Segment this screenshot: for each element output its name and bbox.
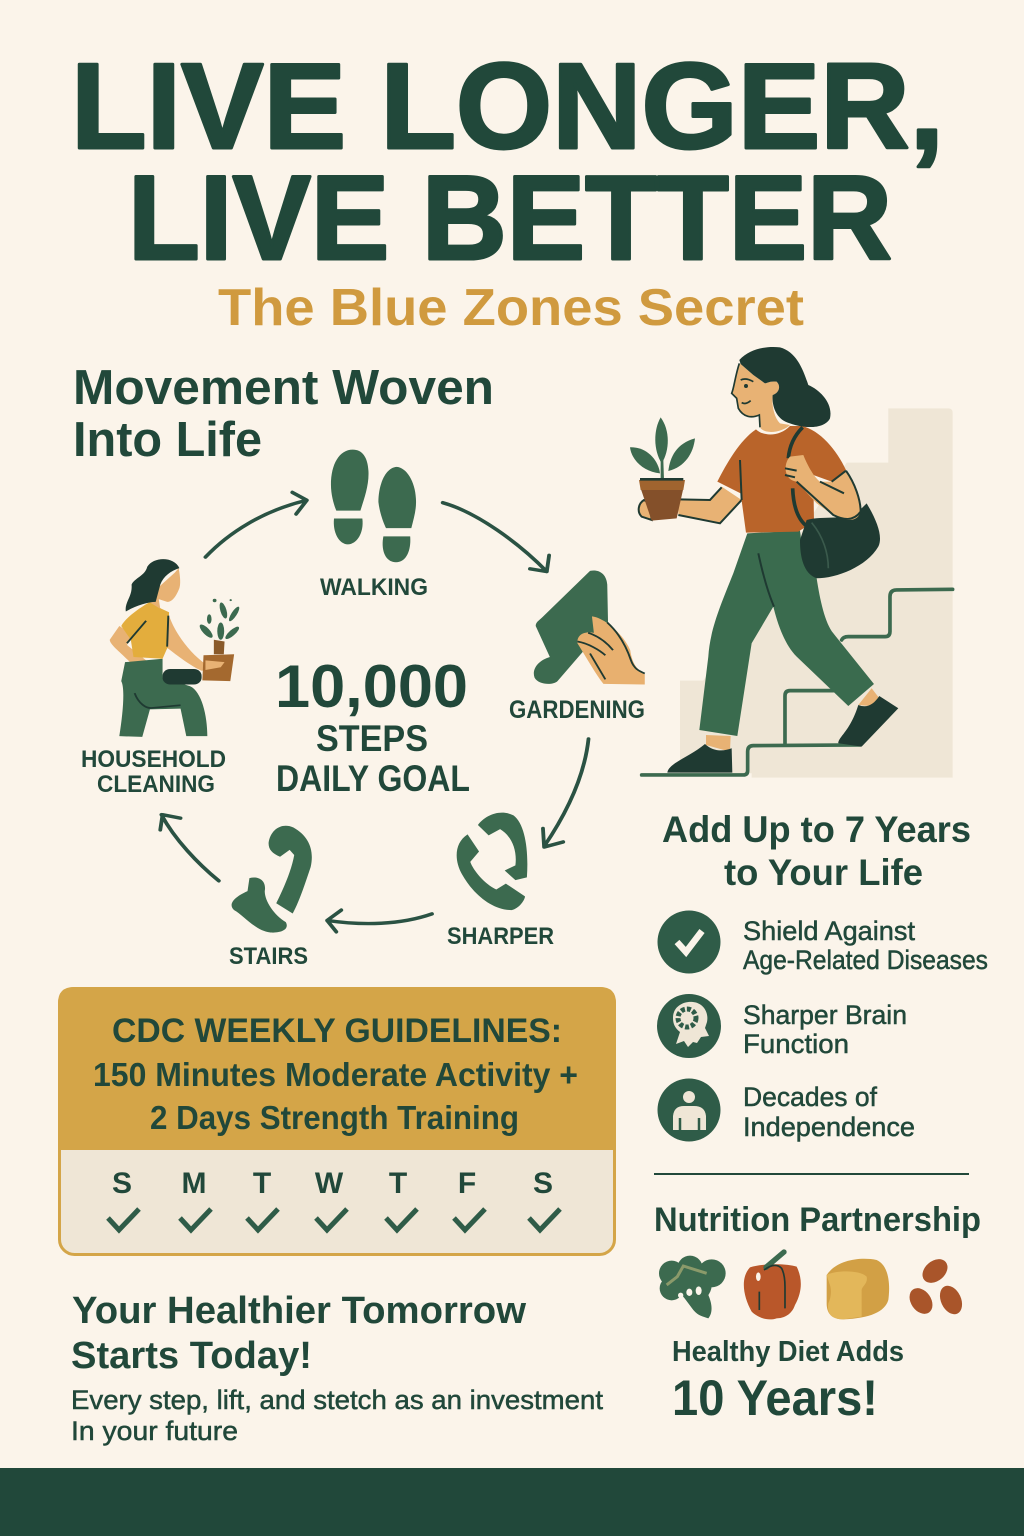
stair rail xyxy=(642,589,953,775)
icon: footprints xyxy=(331,450,416,562)
weekday tracker: M xyxy=(182,1167,206,1200)
body text: In your future xyxy=(71,1416,238,1446)
front arm xyxy=(785,455,861,520)
icon: phone shape xyxy=(457,813,527,910)
heading: healthier tomorrow xyxy=(71,1290,526,1377)
weekday tracker: T xyxy=(253,1167,271,1200)
arrow: gardening to sharper xyxy=(543,739,589,847)
arrow: walking to gardening xyxy=(443,503,549,572)
weekday tracker: F xyxy=(458,1167,476,1200)
heading: add years: Add Up to 7 Years xyxy=(662,809,971,850)
bag xyxy=(788,427,880,578)
box background xyxy=(58,987,616,1254)
footer band xyxy=(0,1468,1024,1536)
body text xyxy=(71,1385,603,1446)
title: LIVE BETTER xyxy=(128,151,892,285)
heading: movement woven into life: Movement Woven xyxy=(73,361,494,415)
shoes and ankles xyxy=(667,688,898,773)
panel: nutrition partnership xyxy=(654,1201,981,1426)
closing message xyxy=(71,1290,603,1446)
trousers xyxy=(699,531,874,736)
heading: healthier tomorrow: Your Healthier Tomorrow xyxy=(72,1290,526,1332)
label: stairs: STAIRS xyxy=(229,943,308,970)
icon: almonds xyxy=(905,1254,966,1318)
weekday tracker: W xyxy=(315,1167,344,1200)
guideline text: 150 Minutes Moderate Activity + xyxy=(93,1056,578,1093)
weekday tracker: S xyxy=(533,1167,553,1200)
benefit: independence xyxy=(743,1082,915,1142)
heading: movement woven into life: Into Life xyxy=(73,413,262,467)
guideline text xyxy=(93,1012,578,1136)
benefit: sharper brain: Function xyxy=(743,1029,849,1059)
weekday tracker xyxy=(108,1167,560,1230)
body text: Every step, lift, and stetch as an investment xyxy=(71,1385,603,1415)
icon: brain badge xyxy=(657,994,721,1058)
illustration: woman with plant xyxy=(110,559,241,737)
head xyxy=(732,347,830,432)
arrow: sharper to stairs xyxy=(327,910,432,932)
weekday tracker: S xyxy=(112,1167,132,1200)
icon: gardening cloth and hand xyxy=(534,571,645,685)
shirt xyxy=(717,426,846,533)
benefit: sharper brain: Sharper Brain xyxy=(743,1000,907,1030)
label: household cleaning: HOUSEHOLD xyxy=(81,746,226,773)
heading: nutrition: Nutrition Partnership xyxy=(654,1201,981,1239)
heading: healthier tomorrow: Starts Today! xyxy=(71,1335,312,1377)
icon: person badge xyxy=(658,1078,720,1142)
guideline text: 2 Days Strength Training xyxy=(150,1099,519,1136)
benefit: shield against diseases xyxy=(743,916,988,975)
label: household cleaning: CLEANING xyxy=(97,771,215,798)
back arm and plant xyxy=(630,417,742,523)
illustration: woman walking up stairs xyxy=(630,347,953,778)
icon: bread loaf xyxy=(827,1259,889,1319)
stat: 10 years: 10 Years! xyxy=(672,1370,878,1426)
title: LIVE LONGER, xyxy=(71,38,944,174)
weekday tracker: T xyxy=(389,1167,407,1200)
center goal: 10,000 xyxy=(275,653,468,720)
panel: add up to 7 years xyxy=(657,809,988,1142)
label: household cleaning xyxy=(81,746,226,798)
heading: movement woven into life xyxy=(73,361,494,467)
title xyxy=(71,38,944,285)
text: healthy diet adds: Healthy Diet Adds xyxy=(672,1336,904,1368)
icon: check badge xyxy=(658,910,720,974)
heading: add years: to Your Life xyxy=(724,852,923,893)
icon: stairs foot xyxy=(232,826,312,933)
heading: add years xyxy=(662,809,971,893)
center goal xyxy=(275,653,470,799)
icon: broccoli xyxy=(659,1256,726,1318)
label: sharper: SHARPER xyxy=(447,923,554,950)
panel: cdc weekly guidelines xyxy=(58,987,616,1254)
center goal: DAILY GOAL xyxy=(276,758,470,799)
guideline text: CDC WEEKLY GUIDELINES: xyxy=(112,1012,562,1050)
arrow: stairs to household cleaning xyxy=(160,815,219,881)
subtitle: The Blue Zones Secret xyxy=(218,279,804,337)
icon: bell pepper xyxy=(744,1252,801,1319)
center goal: STEPS xyxy=(316,718,428,759)
benefit: shield against diseases: Shield Against xyxy=(743,916,915,946)
activity cycle diagram xyxy=(81,450,645,970)
arrow: household cleaning to walking xyxy=(205,492,307,557)
label: walking: WALKING xyxy=(320,574,428,601)
benefit: independence: Decades of xyxy=(743,1082,877,1112)
stairs background xyxy=(680,408,953,778)
benefit: independence: Independence xyxy=(743,1112,915,1142)
benefit: shield against diseases: Age-Related Diseases xyxy=(743,945,988,975)
label: gardening: GARDENING xyxy=(509,696,645,724)
benefit: sharper brain xyxy=(743,1000,907,1059)
